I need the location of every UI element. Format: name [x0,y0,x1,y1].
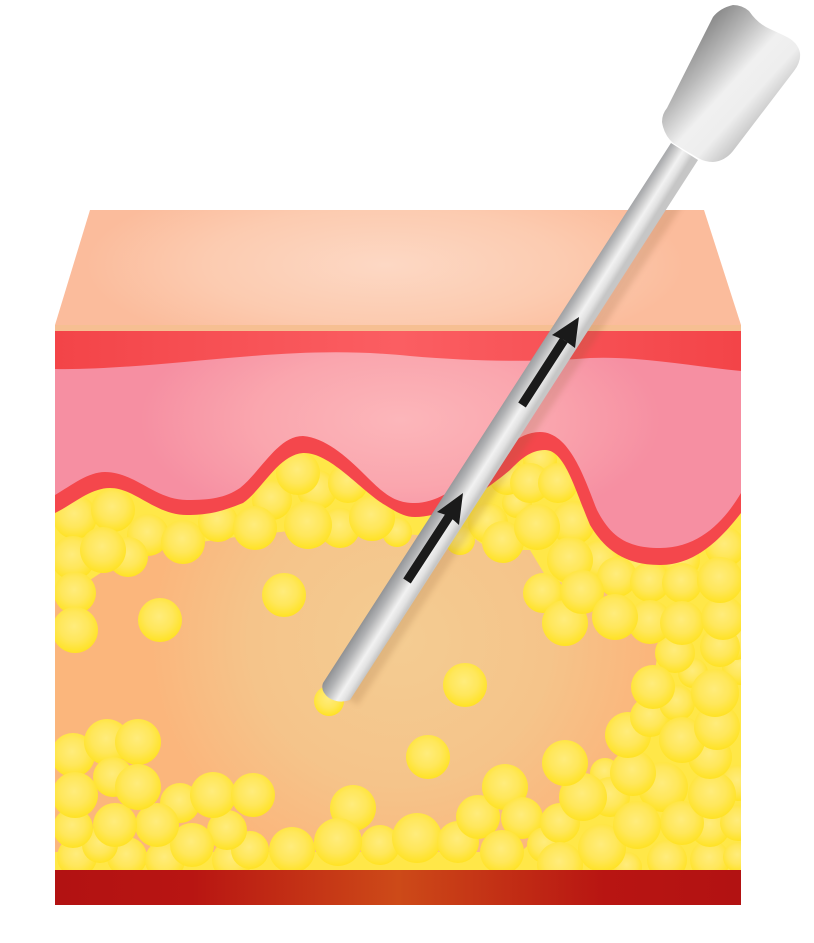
fat cluster: upper left [51,451,412,653]
red epidermis band [55,331,741,371]
fat cluster: right side [589,530,741,779]
skin edge highlight [55,325,741,331]
bottom red muscle band [55,870,741,905]
loose fat cells [138,573,487,779]
arrow: lower [407,493,463,581]
fat cells [55,450,741,870]
fat cluster: lower right [527,740,741,870]
cannula shadow [350,210,680,704]
fat cluster: lower layer [51,719,543,880]
top surface of skin [55,210,741,331]
arrow: upper [522,317,579,405]
pink dermis layer [55,345,741,548]
red dermis boundary [55,345,741,565]
fat cluster: under the dermis right [445,443,638,646]
cannula [322,5,800,702]
fat base: right mass [524,513,741,852]
cannula handle head [662,5,800,162]
subcutaneous fat background [55,430,741,872]
fat cell at cannula tip [314,686,344,716]
cannula shaft [322,143,698,702]
fat base strip [55,852,490,870]
fat base: upper band [55,453,600,586]
